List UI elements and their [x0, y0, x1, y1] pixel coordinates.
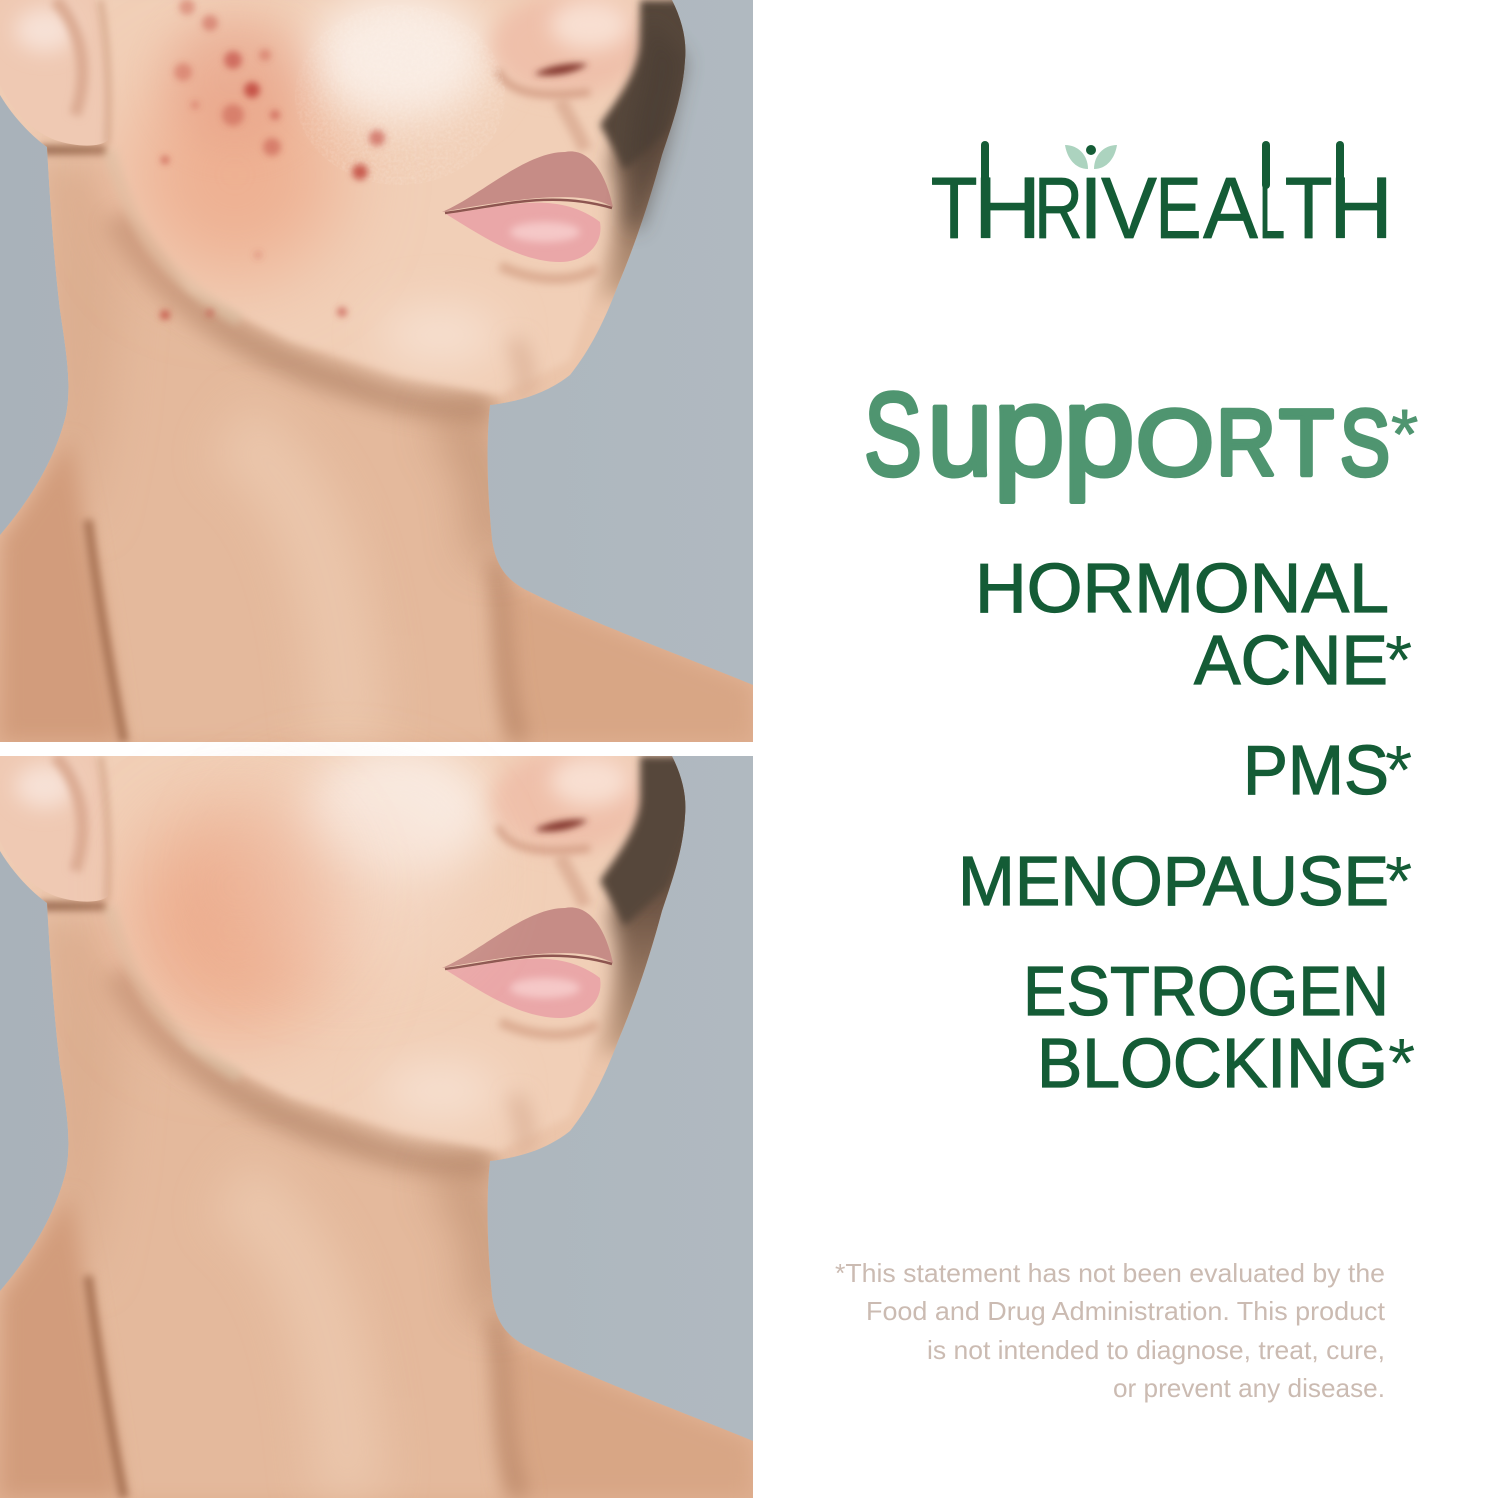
- item: estrogen blocking: ESTROGEN: [1023, 952, 1389, 1030]
- logo wordmark: E: [1156, 160, 1202, 257]
- disclaimer: [835, 1258, 1386, 1403]
- item: menopause: *: [1385, 842, 1412, 920]
- item: estrogen blocking: *: [1388, 1024, 1415, 1102]
- logo: Thrivealth: [931, 145, 1393, 257]
- item: hormonal acne: *: [1385, 621, 1412, 699]
- soft cheek glow: [225, 786, 465, 966]
- darker shadow side texture: [625, 20, 685, 230]
- item: hormonal acne: ACNE: [1194, 621, 1388, 699]
- logo wordmark: A: [1203, 160, 1258, 257]
- logo icon: figure with leaves: [1065, 145, 1117, 169]
- warm blush: [145, 801, 335, 971]
- item: estrogen blocking: [1023, 952, 1415, 1102]
- logo wordmark: R: [1034, 160, 1083, 257]
- item: estrogen blocking: BLOCKING: [1037, 1024, 1388, 1102]
- logo wordmark: I: [1079, 160, 1103, 257]
- panel: after photo with clear skin: [0, 746, 753, 1498]
- item: hormonal acne: HORMONAL: [975, 549, 1389, 627]
- logo wordmark: T: [931, 160, 978, 257]
- logo wordmark: H: [1329, 160, 1393, 257]
- heading: Supports: O: [1136, 390, 1214, 495]
- item: menopause: MENOPAUSE: [958, 842, 1389, 920]
- heading: Supports: p: [1063, 359, 1135, 503]
- disclaimer: or prevent any disease.: [1113, 1373, 1385, 1403]
- logo wordmark: T: [1285, 160, 1333, 257]
- disclaimer: *This statement has not been evaluated by the: [835, 1258, 1385, 1288]
- item: hormonal acne: [975, 549, 1412, 699]
- heading: Supports: p: [993, 359, 1065, 503]
- disclaimer: is not intended to diagnose, treat, cure,: [927, 1335, 1385, 1365]
- logo tall stems: [985, 145, 1340, 185]
- redness around cheek: [165, 15, 305, 145]
- heading: Supports: S: [864, 369, 922, 501]
- logo wordmark: H: [974, 160, 1042, 257]
- logo wordmark: L: [1259, 160, 1285, 257]
- heading: Supports: [864, 359, 1418, 503]
- heading: Supports: *: [1391, 395, 1418, 473]
- item: PMS: *: [1385, 731, 1412, 809]
- list: conditions supported: [958, 549, 1415, 1102]
- heading: Supports: R: [1216, 390, 1276, 495]
- panel: before photo with acne: [0, 0, 753, 742]
- acne spots: [160, 0, 385, 320]
- disclaimer: Food and Drug Administration. This product: [866, 1296, 1386, 1326]
- cheek skin texture: [296, 61, 504, 184]
- logo wordmark: V: [1101, 160, 1157, 257]
- logo wordmark: [931, 160, 1393, 257]
- heading: Supports: S: [1340, 390, 1390, 495]
- heading: Supports: u: [927, 359, 993, 503]
- item: PMS: PMS: [1243, 731, 1389, 809]
- heading: Supports: T: [1279, 390, 1334, 495]
